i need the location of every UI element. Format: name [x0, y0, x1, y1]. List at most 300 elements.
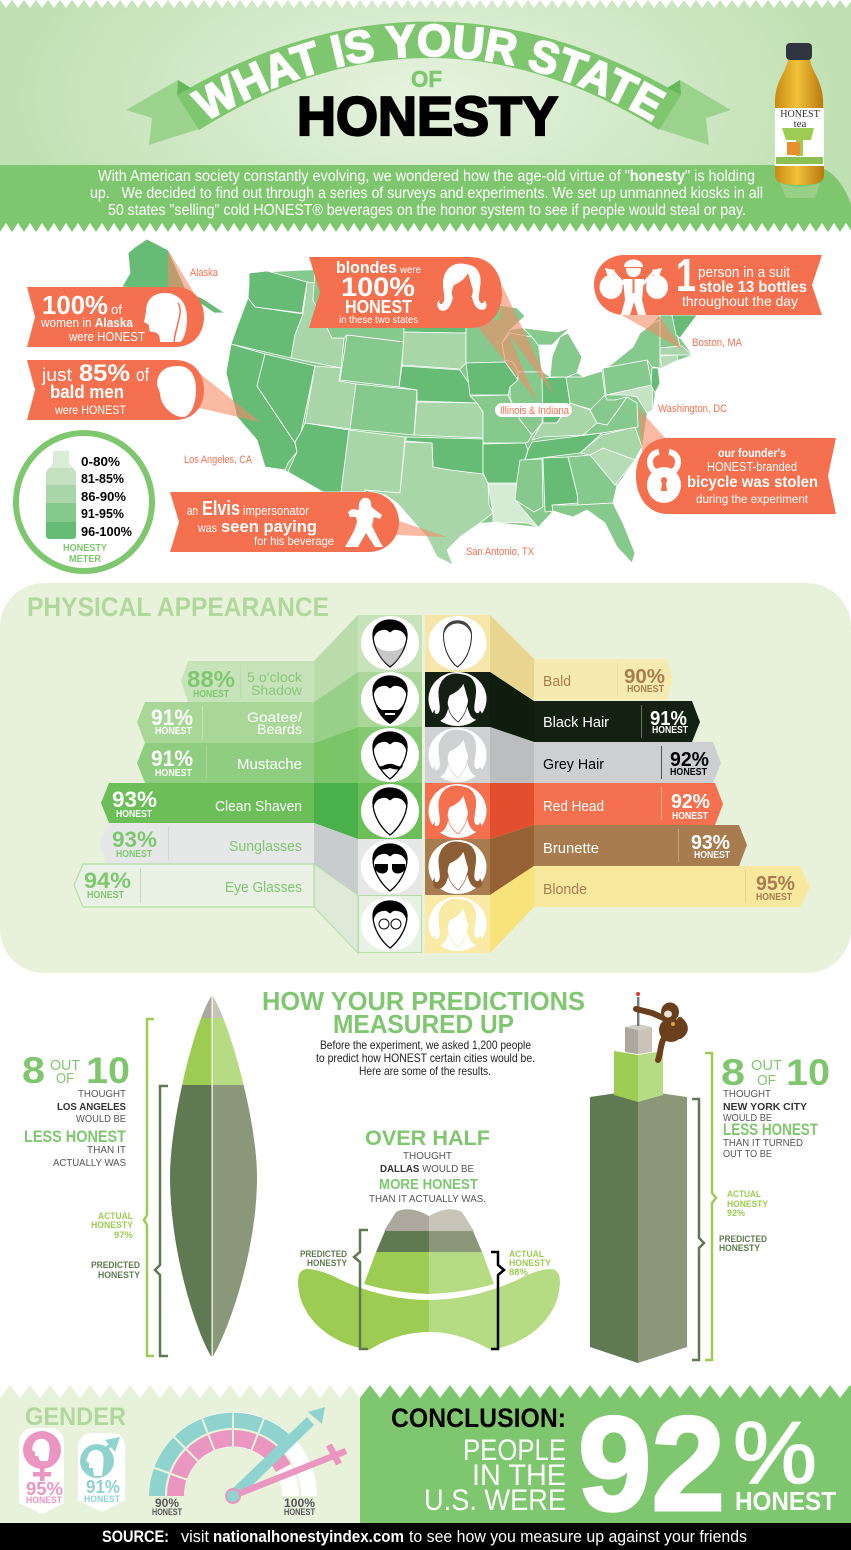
bar: bald: HONEST — [627, 684, 664, 695]
label: predicted: PREDICTED — [719, 1234, 767, 1245]
Mississippi — [515, 459, 543, 512]
label: Illinois and Indiana: Illinois & Indiana — [500, 405, 570, 417]
Montana — [313, 270, 404, 342]
stat: New York City: LESS HONEST — [723, 1121, 818, 1139]
women faces column — [425, 615, 490, 953]
stat: Los Angeles: WOULD BE — [76, 1113, 126, 1125]
bar: 5 o'clock shadow: Shadow — [251, 682, 303, 698]
label: actual: HONESTY — [509, 1258, 552, 1269]
panel: gender — [0, 1385, 360, 1523]
icon: bald face — [428, 616, 486, 670]
text: throughout the day — [682, 293, 798, 309]
Maine — [672, 315, 697, 338]
stat: New York City: WOULD BE — [723, 1112, 772, 1124]
North Carolina — [580, 427, 642, 460]
bar: red head: 92% — [671, 791, 710, 813]
bar: 5 o'clock shadow: 5 o'clock — [247, 669, 303, 685]
bar: clean shaven: HONEST — [116, 809, 152, 820]
label: actual: ACTUAL — [727, 1189, 761, 1200]
intro text: 50 states "selling" cold HONEST® beverages on the honor system to see if people would steal or pay. — [108, 202, 746, 219]
bar: eye glasses — [74, 864, 314, 907]
callout: women in Alaska — [27, 287, 204, 347]
label: predicted honesty: PREDICTED — [91, 1260, 140, 1271]
California — [226, 344, 297, 470]
big number: HONEST — [735, 1486, 836, 1516]
stat: New York City: OUT — [751, 1057, 782, 1074]
icon: blonde hair — [437, 263, 487, 312]
stat: Dallas: DALLAS WOULD BE — [380, 1163, 474, 1175]
bar: red head: HONEST — [672, 811, 708, 822]
stat: Los Angeles: ACTUALLY WAS — [53, 1157, 126, 1169]
intro text: up. We decided to find out through a series of surveys and experiments. We set up unmanned kiosks in all — [90, 185, 763, 202]
icon: clean shaven face — [361, 784, 419, 838]
bar: grey hair: HONEST — [670, 767, 707, 778]
icon: glasses face — [361, 897, 419, 951]
Kentucky — [532, 403, 597, 440]
text: bicycle was stolen — [687, 474, 818, 491]
map labels: San Antonio, TX — [466, 546, 535, 558]
text: was — [197, 521, 217, 535]
label: actual honesty: 97% — [114, 1230, 134, 1241]
label: actual: HONESTY — [727, 1199, 769, 1210]
bar: goatee: Goatee/ — [247, 709, 302, 725]
Oregon — [231, 298, 303, 358]
Tennessee — [525, 433, 602, 460]
South Dakota — [402, 332, 466, 369]
Illinois — [510, 372, 543, 435]
stat: New York City: OF — [757, 1072, 776, 1089]
conclusion text: PEOPLE — [463, 1434, 566, 1467]
meter caption: METER — [69, 554, 102, 565]
chart: cowboy hat Dallas — [298, 1209, 560, 1350]
stat: Los Angeles: OUT — [50, 1057, 80, 1074]
icon: gorilla — [636, 1002, 685, 1060]
big number — [578, 1390, 836, 1539]
bar: clean shaven: Clean Shaven — [215, 798, 302, 815]
stat: Los Angeles: OF — [56, 1070, 74, 1087]
bar: bald: Bald — [543, 673, 571, 690]
Minnesota — [466, 300, 525, 363]
Arkansas — [483, 443, 528, 483]
heading: GENDER — [25, 1403, 126, 1431]
text: impersonator — [243, 503, 310, 518]
conclusion heading: CONCLUSION: — [391, 1403, 566, 1433]
meter caption: HONESTY — [63, 543, 107, 554]
stat: New York City: THOUGHT — [723, 1088, 772, 1100]
intro band — [0, 165, 851, 232]
text — [187, 498, 334, 548]
label: predicted honesty — [91, 1260, 141, 1281]
icon: honest tea bottle — [775, 43, 824, 198]
top zigzag edge — [0, 0, 851, 8]
stat: Los Angeles: LOS ANGELES — [57, 1101, 126, 1113]
scale labels: 0-80% — [81, 455, 120, 469]
icon: bald head — [157, 366, 196, 417]
icon: honest tea bottle: HONEST — [780, 109, 820, 120]
callout: man in suit with bottles — [594, 249, 822, 315]
text: HONEST — [345, 297, 412, 317]
icon: red head face — [428, 784, 486, 838]
New Mexico — [341, 430, 405, 493]
outer scale: male — [149, 1413, 289, 1496]
honesty meter legend — [16, 433, 152, 571]
needle: male — [229, 1407, 325, 1500]
stat: New York City: NEW YORK CITY — [723, 1101, 807, 1113]
section heading: predictions: HOW YOUR PREDICTIONS — [262, 986, 585, 1016]
New Jersey — [651, 368, 660, 393]
stat: New York City: THAN IT TURNED — [723, 1137, 803, 1149]
Nebraska — [399, 366, 480, 403]
heading: PHYSICAL APPEARANCE — [27, 592, 329, 622]
stat: Los Angeles: THOUGHT — [78, 1088, 127, 1100]
label: predicted: HONESTY — [719, 1243, 761, 1254]
South Carolina — [590, 448, 635, 485]
intro text: Before the experiment, we asked 1,200 people — [320, 1038, 531, 1052]
bar: sunglasses: Sunglasses — [229, 838, 302, 855]
icon: brunette face — [428, 840, 486, 894]
ribbon arc — [177, 22, 681, 130]
inner scale: female — [167, 1429, 291, 1496]
text: an — [187, 503, 198, 518]
brace: actual — [491, 1252, 504, 1349]
callout: Elvis impersonator — [170, 492, 399, 552]
Indiana — [542, 377, 570, 423]
Nevada — [257, 354, 315, 443]
Louisiana — [488, 484, 538, 527]
big number: % — [733, 1403, 817, 1502]
bar: mustache: 91% — [151, 746, 193, 771]
Idaho — [291, 282, 344, 368]
bar: brunette: Brunette — [543, 840, 599, 857]
scale labels: 81-85% — [81, 472, 124, 486]
conclusion text: U.S. WERE — [424, 1484, 566, 1517]
bar: bald — [534, 659, 673, 700]
meter caption — [63, 543, 107, 565]
icon: Elvis silhouette — [345, 498, 383, 547]
icon: black hair face — [428, 672, 486, 726]
map labels: Boston, MA — [692, 337, 743, 349]
section heading: predictions: MEASURED UP — [333, 1009, 514, 1039]
bar: clean shaven — [101, 783, 314, 823]
label: predicted: PREDICTED — [300, 1249, 347, 1260]
stat: Dallas: MORE HONEST — [379, 1176, 478, 1193]
stat: Dallas: THAN IT ACTUALLY WAS. — [369, 1193, 486, 1205]
big number: 92 — [578, 1390, 725, 1539]
bar: mustache: Mustache — [237, 756, 302, 773]
needle: female — [233, 1445, 346, 1496]
bar: bald: 90% — [624, 666, 665, 688]
bar: blonde: 95% — [756, 873, 795, 895]
bar: eye glasses: 94% — [84, 868, 131, 893]
icon: blonde face — [428, 897, 486, 951]
Maryland and Delaware — [606, 385, 653, 413]
Oklahoma — [406, 437, 483, 474]
bar: goatee: HONEST — [155, 726, 192, 737]
text: our founder's — [718, 446, 786, 460]
Vermont and New Hampshire — [660, 315, 680, 348]
Alaska — [122, 239, 225, 313]
map of the United States — [122, 239, 697, 565]
bar: goatee — [137, 702, 314, 743]
text: 100% — [42, 290, 108, 320]
bar: eye glasses: HONEST — [87, 890, 124, 901]
bar: brunette: HONEST — [694, 850, 730, 861]
Ohio — [566, 371, 605, 410]
bar: red head — [534, 783, 723, 825]
icon: lock — [647, 452, 681, 503]
text: HONEST-branded — [707, 459, 797, 474]
source bar: SOURCE: — [102, 1527, 169, 1546]
Colorado — [350, 384, 417, 435]
intro text: With American society constantly evolving, we wondered how the age-old virtue of "honesty" is holding — [98, 168, 755, 185]
brace: actual — [144, 1019, 154, 1356]
bar: goatee: 91% — [151, 705, 193, 730]
Utah — [305, 366, 356, 429]
map labels: Los Angeles, CA — [184, 454, 253, 466]
Florida — [552, 503, 635, 563]
text: women in Alaska — [40, 315, 134, 330]
label: 100 percent — [284, 1496, 315, 1517]
icon: woman profile — [144, 293, 187, 342]
stat: Los Angeles — [22, 1050, 141, 1281]
bar: brunette — [534, 825, 747, 866]
Missouri — [470, 395, 532, 443]
Massachusetts — [660, 346, 692, 355]
panel: physical appearance — [0, 583, 851, 973]
text — [41, 360, 150, 417]
scale labels: 86-90% — [81, 490, 126, 504]
brace: predicted — [692, 1099, 704, 1360]
pointer cones — [168, 250, 683, 537]
bar: sunglasses: HONEST — [116, 849, 152, 860]
badge: female — [19, 1428, 64, 1514]
callout: stolen bicycle — [636, 438, 836, 514]
label: 100 percent: 100% — [284, 1496, 315, 1510]
text — [676, 249, 807, 309]
honesty: HONESTY — [297, 85, 558, 147]
chart: gender gauge — [149, 1407, 346, 1517]
intro text: to predict how HONEST certain cities would be. — [316, 1051, 535, 1065]
badge: male: 91% — [86, 1477, 120, 1497]
text: were HONEST — [68, 329, 145, 344]
bar: eye glasses: Eye Glasses — [225, 879, 302, 896]
connectors — [314, 615, 358, 953]
text: bald men — [50, 382, 124, 402]
icon: honest tea bottle: tea — [794, 118, 807, 130]
Michigan — [523, 328, 582, 377]
text: during the experiment — [696, 492, 809, 506]
icon: suited man with bags — [600, 260, 668, 315]
source bar — [0, 1523, 851, 1550]
bar: black hair: Black Hair — [543, 714, 609, 731]
text: stole 13 bottles — [699, 279, 807, 296]
stat: Los Angeles: THAN IT — [87, 1144, 127, 1156]
ribbon fold shading — [177, 80, 681, 95]
right column bars — [490, 615, 810, 953]
badge: male — [78, 1433, 125, 1512]
bar: blonde: HONEST — [756, 892, 792, 903]
panel: conclusion — [0, 1385, 851, 1539]
North Dakota — [404, 270, 466, 333]
label: 100 percent: HONEST — [284, 1507, 315, 1517]
Arizona — [288, 423, 349, 492]
header background — [0, 0, 851, 225]
label: 90 percent — [152, 1496, 182, 1517]
label: predicted honesty: HONESTY — [98, 1270, 141, 1281]
label: predicted: HONESTY — [307, 1258, 348, 1269]
New York — [603, 320, 660, 368]
bar: mustache: HONEST — [155, 768, 192, 779]
text: were HONEST — [54, 403, 127, 417]
text: blondes — [336, 258, 397, 277]
bar: red head: Red Head — [543, 798, 604, 815]
label: predicted — [719, 1234, 767, 1254]
icon: goatee face — [361, 672, 419, 726]
icon: grey hair face — [428, 728, 486, 782]
stat: Dallas: OVER HALF — [365, 1127, 490, 1150]
bar: blonde: Blonde — [543, 881, 587, 898]
stat: Los Angeles: 10 — [86, 1050, 130, 1091]
badge: female: HONEST — [26, 1495, 62, 1505]
left column bars — [74, 615, 358, 953]
bar: grey hair — [534, 742, 721, 783]
Washington — [248, 271, 307, 313]
stat: Los Angeles: LESS HONEST — [24, 1127, 127, 1146]
bar: black hair: HONEST — [652, 725, 688, 736]
Kansas — [414, 402, 483, 438]
bar: mustache — [137, 743, 314, 783]
label: actual honesty — [91, 1211, 134, 1241]
stat: Dallas — [365, 1127, 490, 1205]
bar: 5 o'clock shadow: 88% — [187, 666, 235, 692]
callout: bald men — [27, 360, 204, 420]
scale labels: 91-95% — [81, 507, 124, 521]
icon: sunglasses face — [361, 840, 419, 894]
needle hub — [226, 1489, 240, 1503]
text: 100% — [341, 272, 415, 302]
title — [126, 22, 731, 147]
text: were — [399, 265, 421, 276]
footer zigzag — [0, 1385, 851, 1398]
bottle scale — [46, 451, 76, 539]
Texas — [365, 442, 493, 565]
bar: 5 o'clock shadow — [181, 661, 314, 702]
brace: predicted — [354, 1230, 368, 1349]
map labels: Washington, DC — [658, 403, 727, 415]
callout: blondes — [309, 257, 502, 328]
label: 90 percent: HONEST — [152, 1507, 182, 1517]
scale labels — [81, 455, 132, 539]
text: for his beverage — [254, 534, 334, 548]
chart: surfboard Los Angeles — [144, 990, 262, 1360]
source bar: nationalhonestyindex.com — [213, 1527, 404, 1546]
brace: actual — [705, 1053, 716, 1360]
scale labels: 96-100% — [81, 525, 132, 539]
text: 1 — [676, 249, 696, 301]
text — [687, 446, 818, 506]
label: actual: ACTUAL — [509, 1249, 544, 1260]
Pennsylvania — [603, 360, 652, 395]
label: actual: 88% — [509, 1267, 529, 1278]
source bar: to see how you measure up against your friends — [409, 1527, 747, 1546]
ribbon tails — [126, 80, 731, 145]
ribbon text: WHAT IS YOUR STATE — [189, 24, 667, 122]
bar: brunette: 93% — [691, 832, 730, 854]
stat: Los Angeles: 8 — [22, 1050, 45, 1091]
Georgia — [568, 455, 617, 505]
text — [336, 258, 421, 326]
text: 85% — [79, 360, 130, 387]
Wisconsin — [502, 333, 542, 372]
label: actual — [727, 1189, 769, 1219]
label: actual honesty: ACTUAL — [98, 1211, 133, 1222]
bar: black hair — [534, 701, 700, 742]
mainland silhouette — [226, 270, 697, 565]
map labels: Alaska — [190, 267, 219, 279]
intro text — [316, 1038, 535, 1078]
map labels — [184, 267, 743, 558]
ring gap and segment dividers — [152, 1410, 300, 1496]
text: Elvis — [202, 498, 240, 520]
label: predicted — [300, 1249, 348, 1269]
stat: Dallas: THOUGHT — [403, 1150, 453, 1162]
label: actual: 92% — [727, 1208, 746, 1219]
icon: mustache face — [361, 728, 419, 782]
bar: grey hair: 92% — [670, 749, 709, 771]
Wyoming — [340, 335, 404, 387]
source bar: visit — [181, 1527, 209, 1546]
bar: goatee: Beards — [257, 721, 302, 737]
connectors — [490, 615, 534, 953]
bar: grey hair: Grey Hair — [543, 756, 604, 773]
conclusion text — [424, 1434, 566, 1517]
Virginia — [583, 397, 638, 435]
stat: New York City: 8 — [721, 1052, 745, 1093]
bar: sunglasses — [99, 823, 314, 864]
stat: New York City: OUT TO BE — [723, 1148, 772, 1160]
conclusion text: IN THE — [472, 1459, 566, 1492]
bar: blonde — [534, 866, 810, 907]
men faces column — [358, 615, 422, 952]
label: 90 percent: 90% — [155, 1496, 179, 1510]
West Virginia — [590, 395, 627, 425]
label: actual honesty: HONESTY — [91, 1220, 134, 1231]
section heading: predictions — [262, 986, 585, 1078]
text: just — [41, 365, 72, 385]
intro text — [90, 168, 763, 219]
Alabama — [543, 457, 578, 512]
bar: sunglasses: 93% — [112, 827, 157, 852]
white remainder of scale — [149, 1412, 317, 1496]
of: OF — [411, 66, 442, 92]
chart: skyscraper New York — [590, 992, 716, 1363]
text: of — [136, 365, 150, 385]
brace: predicted — [155, 1086, 168, 1356]
badge: male: HONEST — [84, 1494, 120, 1504]
icon: stubble face — [361, 616, 419, 670]
stat: New York City: 10 — [786, 1052, 830, 1093]
bar: 5 o'clock shadow: HONEST — [193, 689, 229, 700]
intro text: Here are some of the results. — [359, 1064, 491, 1078]
text: in these two states — [339, 314, 418, 326]
text — [40, 290, 145, 344]
bar: black hair: 91% — [650, 708, 687, 730]
text: seen paying — [221, 517, 317, 536]
badge: female: 95% — [26, 1479, 63, 1499]
Iowa — [466, 362, 518, 395]
Connecticut and Rhode Island — [660, 355, 678, 368]
bottom zigzag — [0, 223, 851, 232]
